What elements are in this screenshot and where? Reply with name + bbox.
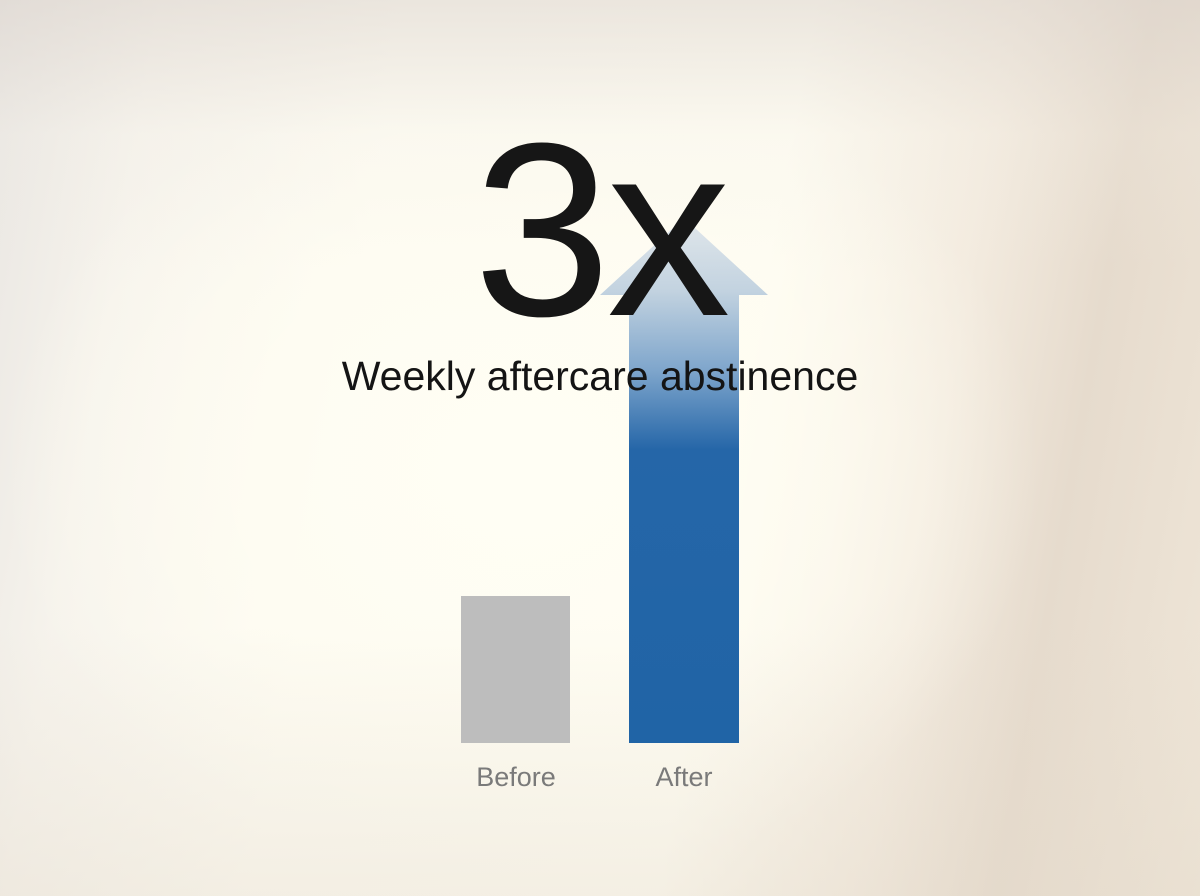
label: after: After [655, 762, 713, 792]
headline: 3x: 3x [474, 92, 726, 368]
label: before: Before [476, 762, 556, 792]
subtitle: Weekly aftercare abstinence [342, 353, 858, 399]
bar: before [461, 596, 570, 743]
arrow: after [600, 218, 768, 743]
